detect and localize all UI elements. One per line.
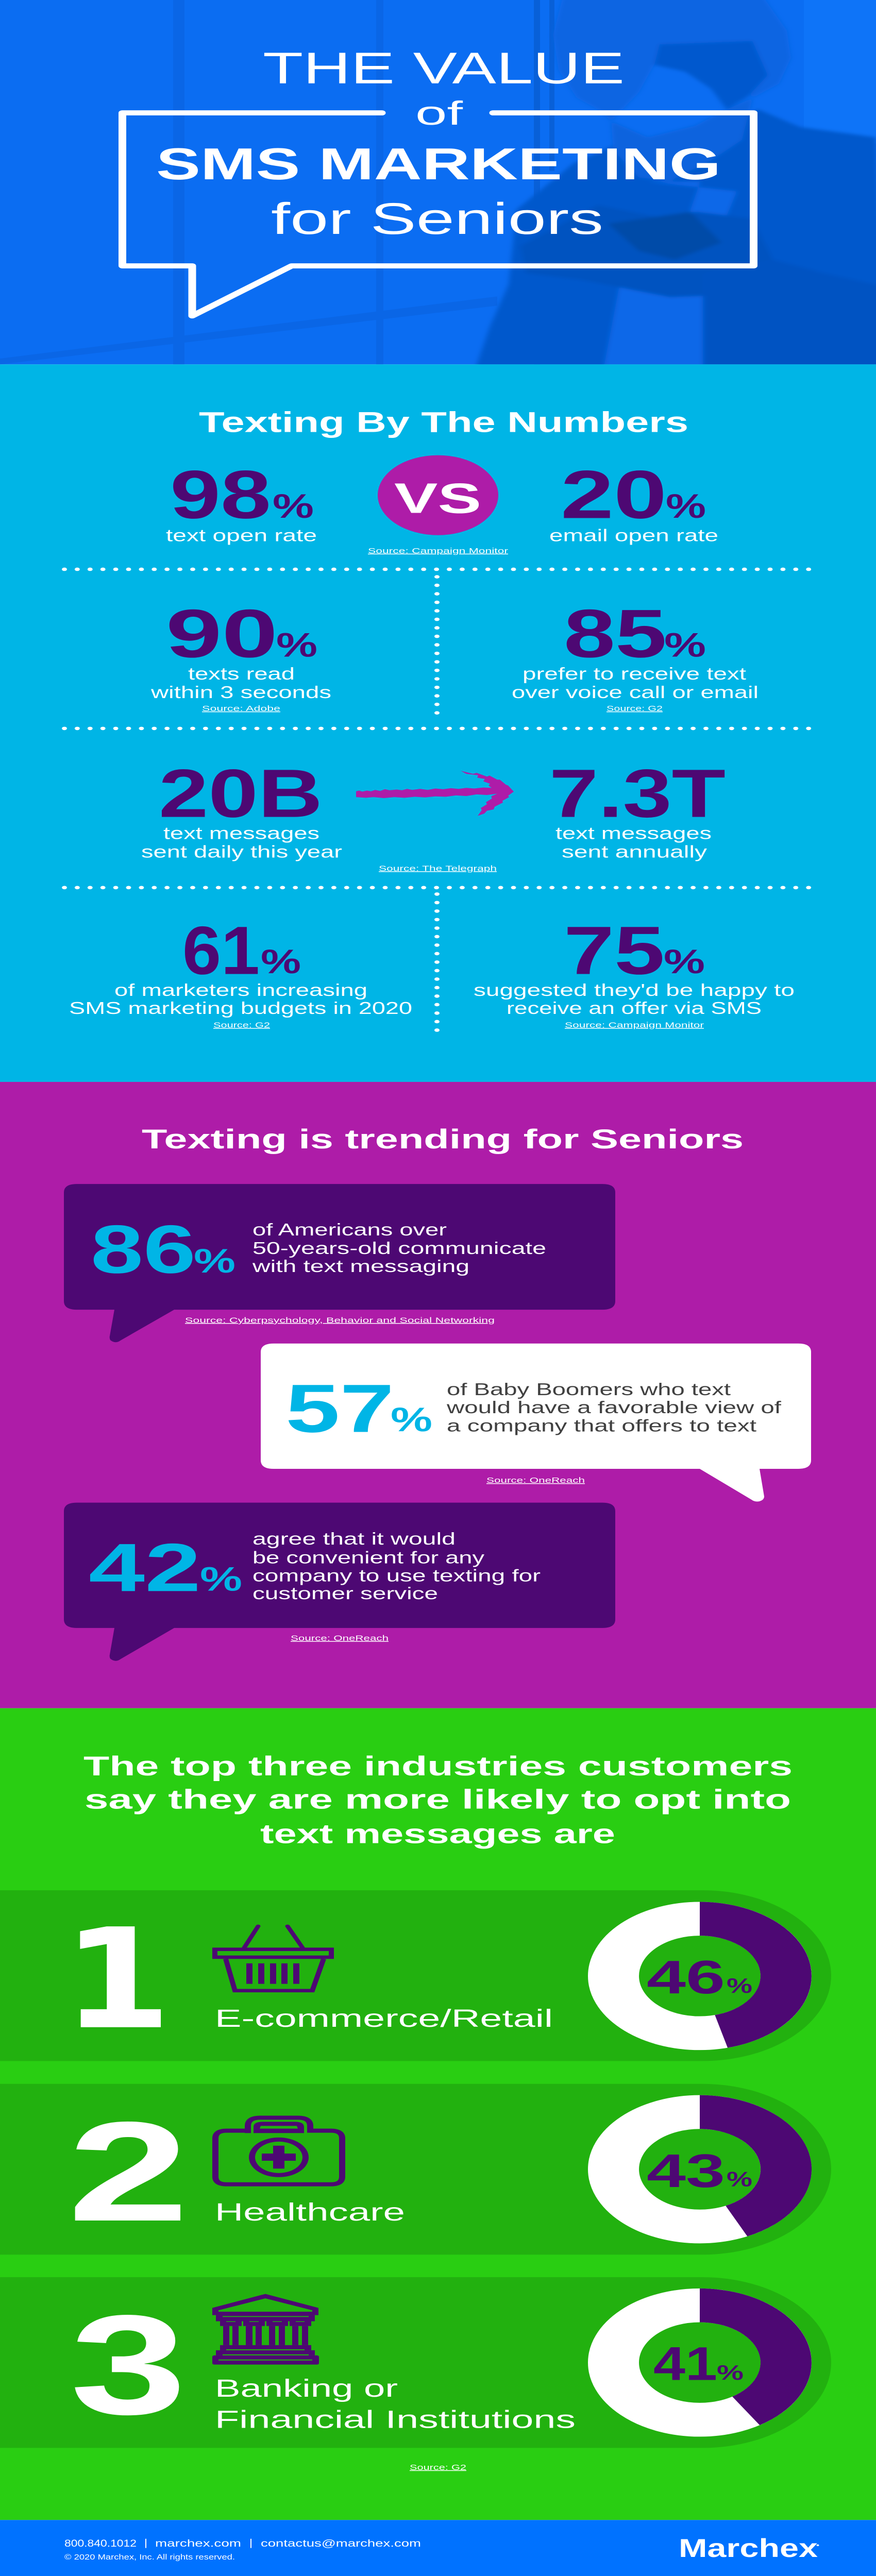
stat: 90% texts read: within 3 seconds xyxy=(150,683,331,702)
heading xyxy=(83,1751,793,1849)
stat: 75% suggested xyxy=(474,912,795,1029)
stat: 20B text messages daily: sent daily this year xyxy=(141,842,342,861)
image: window frame and background xyxy=(0,0,554,365)
callout: 86%: % xyxy=(194,1242,235,1280)
callout: 42%: customer service xyxy=(252,1584,438,1603)
stat: 90% texts read: 90 xyxy=(166,595,278,671)
stat: 98% text open rate: text open rate xyxy=(166,526,317,545)
source: Source: Campaign Monitor xyxy=(368,547,508,555)
source: Source: OneReach xyxy=(486,1476,585,1484)
stat: 20B text messages daily: text messages xyxy=(163,824,319,843)
donut chart: 46%: 46 xyxy=(647,1951,725,2004)
stat: 61% marketers: of marketers increasing xyxy=(114,980,367,999)
callout: 86%: 50-years-old communicate xyxy=(252,1239,546,1258)
donut chart: 46%: % xyxy=(727,1974,752,1997)
rank number 1: 1 xyxy=(62,1899,172,2060)
label: Healthcare xyxy=(215,2198,405,2226)
title: of xyxy=(415,94,463,132)
contact details: 800.840.1012 xyxy=(64,2538,137,2549)
stat: 7.3T text messages annually: text messages xyxy=(555,824,712,843)
donut chart: 41%: 41 xyxy=(653,2337,717,2390)
donut chart: 46% xyxy=(613,1919,786,2033)
stat: 20% email open rate: email open rate xyxy=(549,526,718,545)
callout: 57%: of Baby Boomers who text xyxy=(447,1380,731,1399)
stat: 20% email open rate: % xyxy=(666,487,706,525)
stat: 90% texts read: % xyxy=(276,626,317,664)
panel: hero header xyxy=(0,0,876,372)
stat: 20B text messages daily: 20B xyxy=(159,755,323,832)
callout: 42%: agree that it would xyxy=(252,1529,456,1548)
source: Source: G2 xyxy=(410,2463,466,2471)
stat: 98% text open rate xyxy=(166,456,317,545)
icon: medical kit xyxy=(215,2117,342,2184)
heading: The top three industries customers xyxy=(83,1751,793,1782)
callout: 86% xyxy=(64,1184,615,1342)
stat: 20B text messages daily xyxy=(141,755,342,861)
label: Financial Institutions xyxy=(215,2405,576,2433)
stat: 7.3T text messages annually xyxy=(549,755,726,861)
row 1: e-commerce xyxy=(0,1890,831,2061)
stat: 61% marketers xyxy=(69,912,412,1029)
arrow xyxy=(356,771,514,816)
stat: 85% prefer text: prefer to receive text xyxy=(523,664,746,683)
stat: 7.3T text messages annually: 7.3T xyxy=(549,755,726,832)
image: woman with phone xyxy=(474,0,876,372)
title: for Seniors xyxy=(271,194,603,244)
stat: 98% text open rate: 98 xyxy=(170,456,271,533)
stat: 75% suggested: receive an offer via SMS xyxy=(507,998,762,1018)
stat: 75% suggested: 75 xyxy=(564,912,665,989)
heading: text messages are xyxy=(260,1819,615,1849)
callout: 57%: 57 xyxy=(285,1370,394,1447)
stat: 7.3T text messages annually: sent annually xyxy=(562,842,707,861)
source: Source: The Telegraph xyxy=(379,864,497,872)
callout: 57% xyxy=(261,1344,811,1502)
stat: 90% texts read xyxy=(150,595,331,713)
rank number 2: 2 xyxy=(68,2092,189,2251)
stat: 61% marketers: % xyxy=(261,942,301,980)
callout: 42%: % xyxy=(200,1560,242,1598)
label xyxy=(215,2375,576,2433)
stat: 61% marketers: 61 xyxy=(182,912,260,989)
icon: VS circle xyxy=(378,455,498,535)
callout: 57%: a company that offers to text xyxy=(447,1416,756,1435)
stat: 85% prefer text: over voice call or email xyxy=(512,683,759,702)
stat: 20% email open rate xyxy=(549,456,718,545)
heading: Texting By The Numbers xyxy=(199,406,688,438)
stat: 85% prefer text xyxy=(512,595,759,713)
label: Banking or xyxy=(215,2375,398,2402)
contact details: marchex.com xyxy=(155,2538,241,2549)
source: Source: Cyberpsychology, Behavior and Social Networking xyxy=(185,1316,495,1324)
donut chart: 43% xyxy=(613,2112,786,2227)
callout: 57%: % xyxy=(391,1400,432,1438)
donut chart: 43%: 43 xyxy=(647,2144,725,2197)
callout: 86%: 86 xyxy=(91,1211,196,1287)
stat: 85% prefer text: 85 xyxy=(564,595,667,671)
heading: Texting is trending for Seniors xyxy=(142,1124,744,1155)
callout: 42% xyxy=(64,1503,615,1661)
label: E-commerce/Retail xyxy=(215,2005,553,2032)
panel: footer xyxy=(0,2520,876,2576)
row 2: healthcare xyxy=(0,2084,831,2255)
icon: VS circle: VS xyxy=(394,474,481,522)
stat: 90% texts read: texts read xyxy=(188,664,295,683)
panel: texting is trending for seniors xyxy=(0,1082,876,1708)
stat: 75% suggested: suggested they'd be happy to xyxy=(474,980,795,999)
row 3: banking xyxy=(0,2277,831,2448)
rank number 3: 3 xyxy=(70,2285,187,2444)
stat: 20% email open rate: 20 xyxy=(561,456,667,533)
stat: 75% suggested: % xyxy=(664,942,705,980)
callout: 86%: with text messaging xyxy=(252,1257,469,1276)
panel: texting by the numbers xyxy=(0,364,876,1082)
contact details: contactus@marchex.com xyxy=(261,2538,421,2549)
title: SMS MARKETING xyxy=(156,139,721,189)
stat: 61% marketers: SMS marketing budgets in 2020 xyxy=(69,998,412,1018)
heading: say they are more likely to opt into xyxy=(85,1785,791,1815)
speech bubble outline xyxy=(123,113,753,316)
stat: 61% marketers: Source: G2 xyxy=(213,1021,270,1029)
panel: top three industries xyxy=(0,1708,876,2520)
stat: 85% prefer text: % xyxy=(664,626,706,664)
title xyxy=(156,43,721,244)
stat: 90% texts read: Source: Adobe xyxy=(202,704,280,713)
logo: Marchex: Marchex xyxy=(679,2534,818,2563)
source: Source: OneReach xyxy=(291,1634,389,1642)
callout: 42%: company to use texting for xyxy=(252,1566,541,1585)
donut chart: 43%: % xyxy=(727,2167,752,2191)
stat: 98% text open rate: % xyxy=(273,487,314,525)
donut chart: 41%: % xyxy=(717,2361,744,2384)
icon: shopping basket xyxy=(215,1926,331,1991)
contact details xyxy=(64,2538,421,2549)
copyright: © 2020 Marchex, Inc. All rights reserved. xyxy=(64,2553,235,2561)
callout: 57%: would have a favorable view of xyxy=(446,1398,781,1417)
icon: bank building xyxy=(212,2294,319,2365)
stat: 75% suggested: Source: Campaign Monitor xyxy=(565,1021,704,1029)
title: THE VALUE xyxy=(263,43,625,93)
callout: 42%: be convenient for any xyxy=(252,1548,485,1567)
callout: 86%: of Americans over xyxy=(252,1221,447,1239)
stat: 85% prefer text: Source: G2 xyxy=(607,704,663,713)
donut chart: 41% xyxy=(613,2306,786,2420)
callout: 42%: 42 xyxy=(89,1529,201,1605)
